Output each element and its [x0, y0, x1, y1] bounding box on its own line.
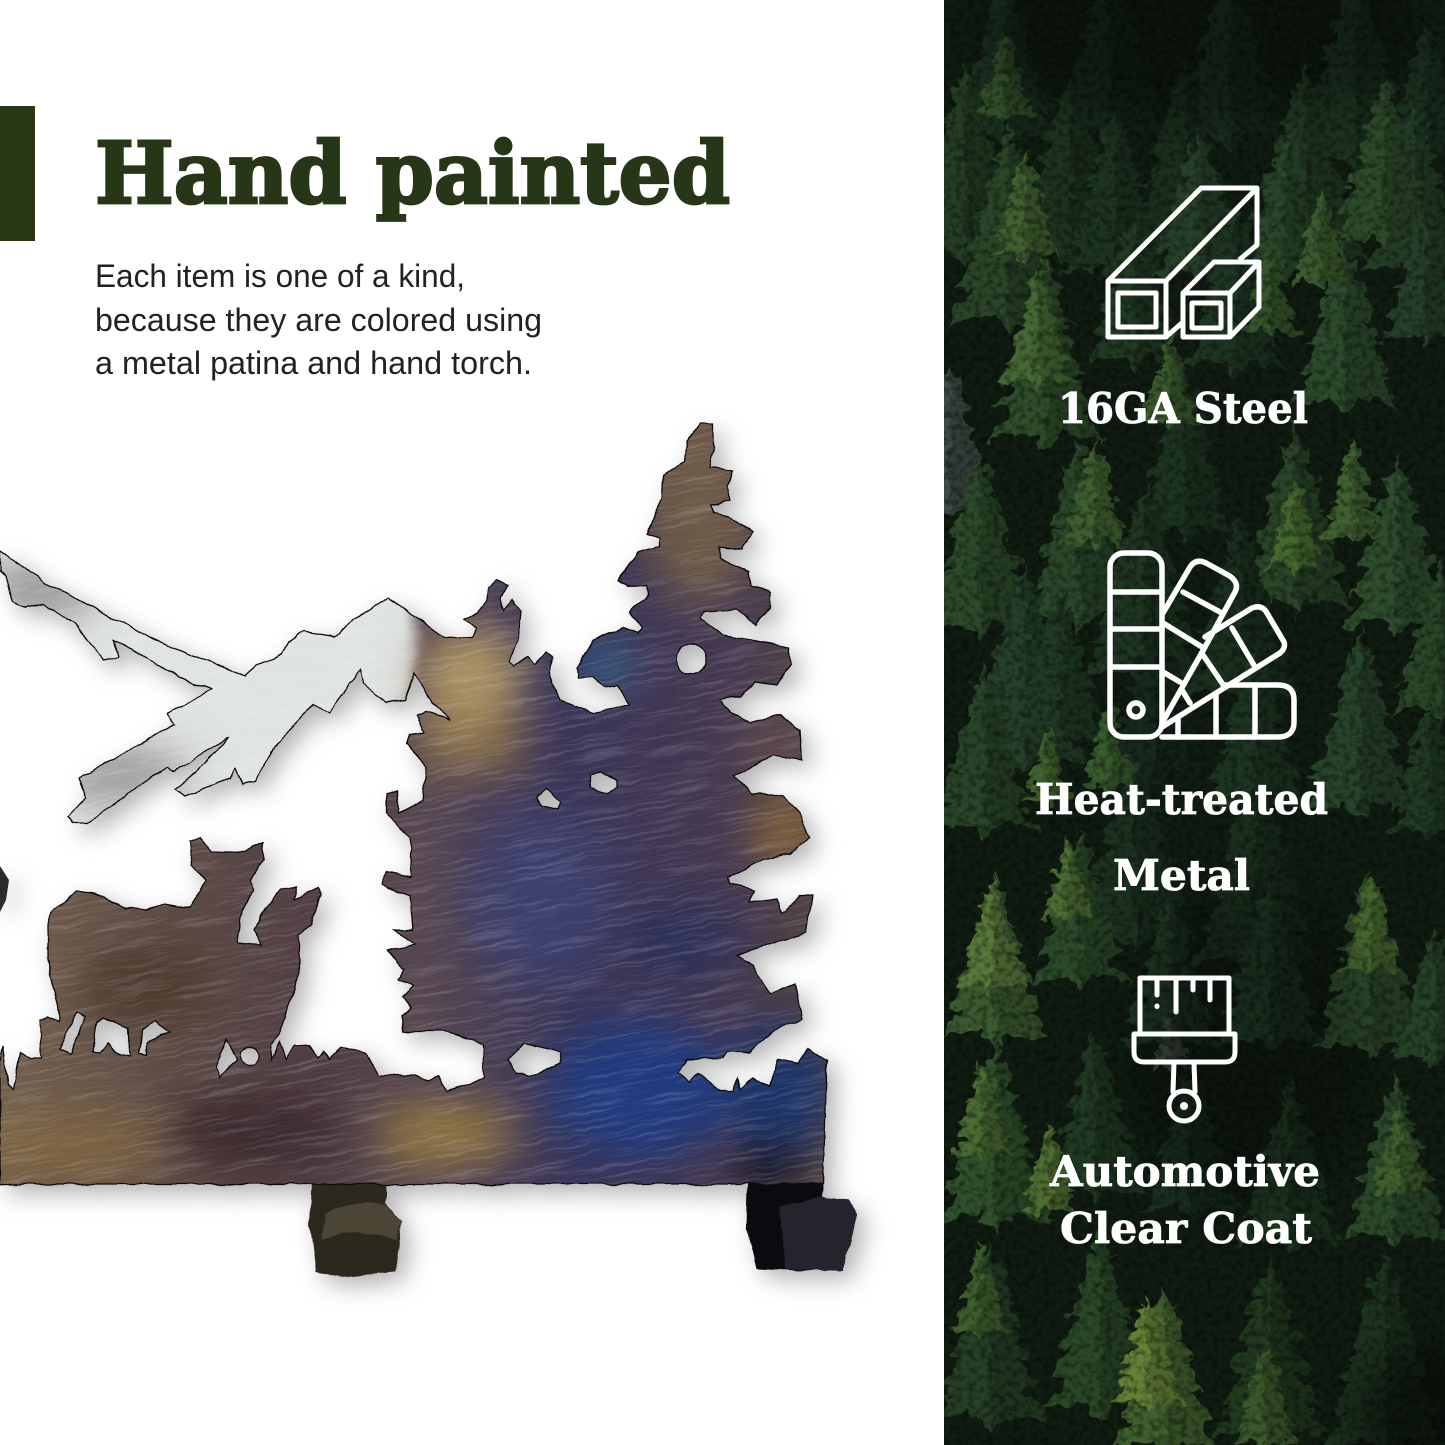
bear cub fragment at edge [0, 866, 9, 912]
description text: Each item is one of a kind, [95, 258, 465, 294]
label: 16GA Steel: 16GA Steel [1058, 384, 1308, 433]
description text: a metal patina and hand torch. [95, 345, 532, 381]
label: Heat-treated Metal: Metal [1113, 851, 1250, 900]
forest trees [900, 0, 1445, 1445]
icon: colour swatch fan [1110, 553, 1294, 737]
title: Hand painted [95, 124, 730, 224]
forest needle texture [944, 0, 1445, 1445]
mountain and tree silhouette [0, 424, 848, 1208]
accent bar [0, 106, 35, 241]
panel: forest background [900, 0, 1445, 1445]
label: Automotive Clear Coat [1049, 1147, 1320, 1253]
description text: because they are colored using [95, 302, 542, 338]
icon: paint brush [1134, 978, 1235, 1121]
icon: steel tubes [1108, 188, 1259, 337]
label: Automotive Clear Coat: Clear Coat [1060, 1204, 1313, 1253]
hook: left [310, 1182, 402, 1277]
metal wall hook product [0, 422, 878, 1299]
description text [95, 258, 542, 381]
label: Heat-treated Metal: Heat-treated [1035, 775, 1328, 824]
label: Heat-treated Metal [1035, 775, 1328, 900]
label: Automotive Clear Coat: Automotive [1049, 1147, 1320, 1196]
hook: right [747, 1184, 857, 1272]
forest darkening shade [980, 0, 1420, 120]
